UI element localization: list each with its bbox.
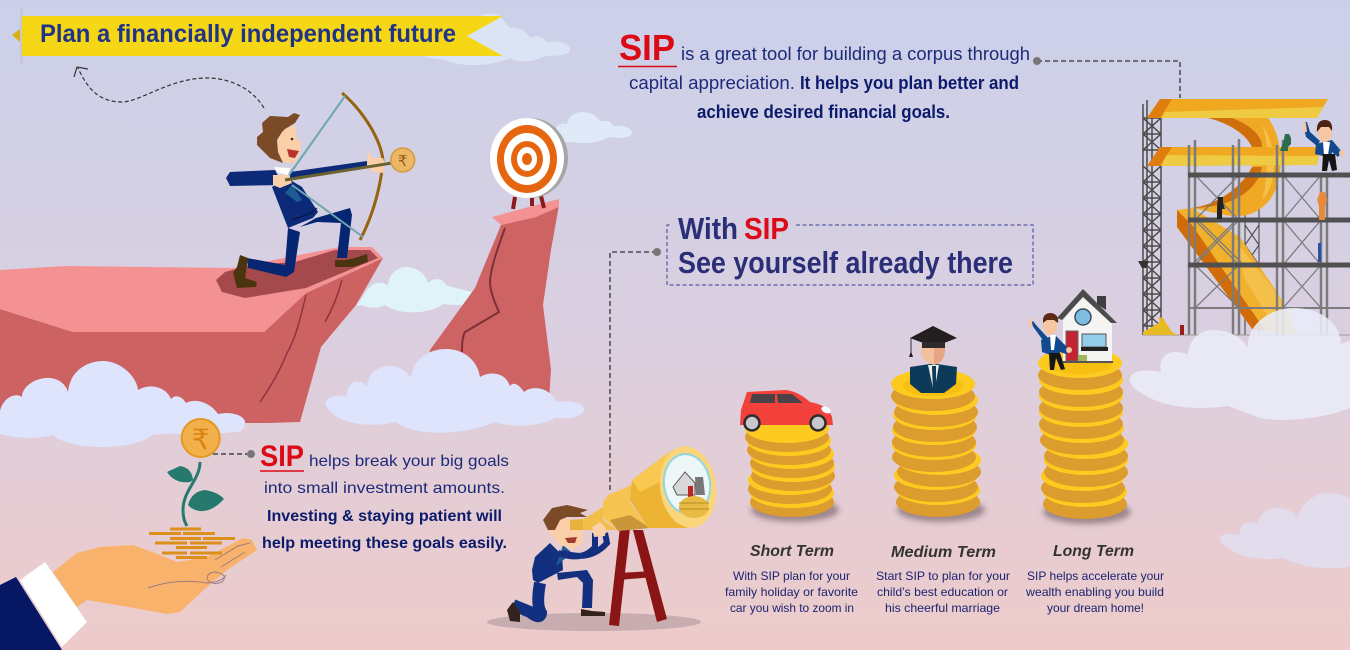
icon: rupee coin: ₹ [398,152,407,170]
lower left cloud [0,361,245,447]
left text: SIP goals: helps break your big goals [309,453,509,470]
mouth [287,149,299,158]
text: short term: Short Term [750,543,834,560]
text: short term: With SIP plan for your [733,569,850,583]
top text: SIP corpus: capital appreciation. [629,72,795,93]
shoes [233,254,368,288]
heading: With SIP See yourself already there: SIP [744,211,789,246]
heading: With SIP See yourself already there: See yourself already there [678,245,1013,280]
heading: With SIP See yourself already there: With [678,211,738,246]
plant growing from hand [0,419,257,650]
cloud behind banner [425,14,570,65]
bow [342,93,383,240]
man: jacket [532,543,563,583]
archer with bow and rupee coin [226,93,415,288]
text: long term: your dream home! [1047,601,1144,615]
rupee coin: ₹ [192,423,210,456]
collar and hands [274,167,290,175]
rear leg [247,228,300,277]
man: front leg [557,570,593,608]
scaffolding [1189,139,1350,335]
heading: With SIP See yourself already there [667,211,1033,285]
dashed arrow pointing to banner [74,67,264,108]
text: long term: wealth enabling you build [1025,585,1164,599]
tripod [609,527,667,626]
text: long term: Long Term [1053,543,1134,560]
text: long term [1025,543,1164,615]
lower right cloud [1220,493,1350,568]
left text: SIP goals: SIP [260,440,304,473]
leaves [167,466,224,511]
middle cloud [325,349,584,433]
text: medium term: Start SIP to plan for your [876,569,1010,583]
text: medium term: Medium Term [891,544,996,561]
left text: SIP goals: Investing & staying patient will [267,508,502,525]
man: hair [543,505,588,530]
top text: SIP corpus: achieve desired financial goals. [697,101,950,122]
text: medium term: his cheerful marriage [885,601,1000,615]
small workers [1280,134,1291,151]
ground shadow [487,613,701,631]
icon: waving man [1029,313,1072,370]
top text: SIP corpus: It helps you plan better and [800,72,1019,93]
eyepiece [570,519,583,530]
text: short term: family holiday or favorite [725,585,858,599]
shirt cuff [20,562,87,647]
coin stack: medium term with graduate [891,326,985,522]
connector [213,453,247,455]
icon: car [740,390,833,430]
man: arms [558,533,607,556]
crane [1143,317,1178,335]
rupee bowl [1192,118,1281,216]
left text: SIP goals: into small investment amounts. [264,480,505,497]
text: long term: SIP helps accelerate your [1027,569,1164,583]
icon: house [1057,289,1117,363]
coin stack: short term with car [740,390,839,522]
connector: with SIP box to telescope [610,248,661,490]
top text: SIP corpus: SIP [619,27,675,68]
coin bricks [149,528,235,559]
rupee middle bar [1147,147,1320,166]
left cliff [0,247,383,423]
arrow shaft [285,163,392,180]
hand [53,538,257,614]
lens [655,443,721,531]
top text: SIP corpus: is a great tool for building a corpus through [681,43,1030,64]
icon: scene in lens [673,472,695,495]
front leg [300,208,352,258]
jacket [272,178,318,228]
man on scaffold [1303,120,1345,171]
back lattice tower [1245,208,1259,335]
icon: graduate [909,326,957,393]
hair [257,113,300,163]
banner: title [12,8,503,64]
top text: SIP corpus [618,27,1030,122]
man: face [548,518,583,549]
text: medium term: child’s best education or [877,585,1008,599]
rupee diagonal leg [1177,208,1297,335]
rupee coin [182,419,220,457]
rupee symbol under construction with scaffolding [1138,99,1350,335]
text: medium term [876,544,1010,615]
ground line [1143,334,1350,336]
text: short term [725,543,858,615]
sleeve [0,577,62,650]
connector: top text to rupee [1033,57,1180,98]
bow string [289,96,363,237]
face [277,125,301,163]
telescope with man [487,443,721,631]
right pillar with target [420,118,568,400]
banner: title: Plan a financially independent future [40,20,456,48]
rupee top bar [1147,99,1328,118]
stem [183,462,200,526]
icon: target [490,118,568,209]
right cloud [1130,308,1350,420]
man: shoes [507,602,605,622]
icon: rupee coin [391,148,415,172]
cloud behind target [556,112,632,143]
text: short term: car you wish to zoom in [730,601,854,615]
man: rear leg [513,583,541,616]
left text: SIP goals [260,440,509,552]
coin stack: long term with house and man [1029,289,1131,524]
telescope tube [582,507,617,530]
man: hands [592,522,606,537]
left lattice tower [1143,100,1161,335]
cloud behind cliff [356,267,472,312]
left text: SIP goals: help meeting these goals easily. [262,535,507,552]
